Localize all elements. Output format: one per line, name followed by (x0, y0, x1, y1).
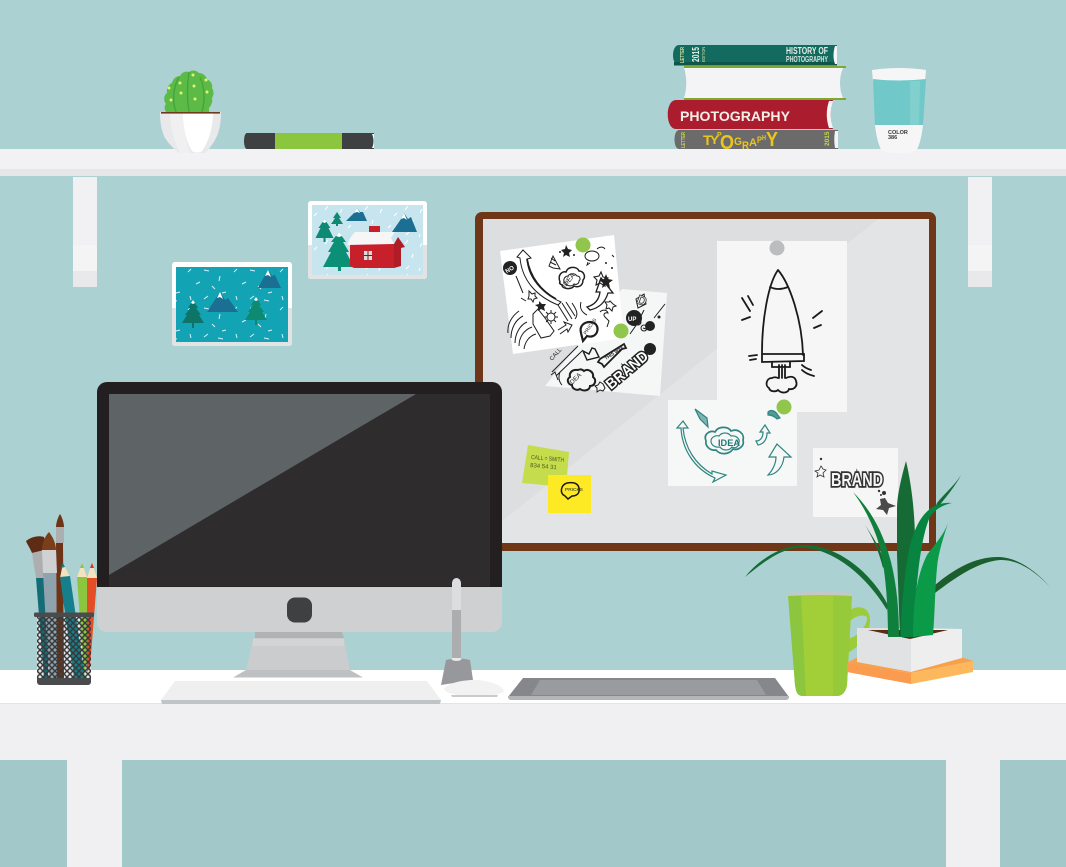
white pot (160, 112, 221, 153)
green pin (776, 400, 792, 414)
colour cup: COLOR (888, 130, 908, 136)
wall shelf (0, 149, 1066, 287)
note: doodles sheet back: CALL (549, 347, 564, 362)
desk top (0, 670, 1066, 703)
thin brush (56, 514, 64, 678)
power button (287, 598, 312, 622)
book: History of Photography: LETTER (680, 47, 686, 63)
shelf bracket left (73, 177, 97, 287)
shelf board (0, 149, 1066, 176)
note: brand sheet: BRAND (831, 470, 883, 490)
flat brush (42, 532, 57, 678)
note: doodles sheet back: D (635, 292, 649, 309)
book: Typography: R (742, 140, 749, 152)
book: History of Photography: PHOTOGRAPHY (786, 55, 828, 64)
book: Typography (674, 129, 838, 154)
book: Typography: Y (766, 129, 779, 151)
book: white pages (684, 66, 846, 100)
cup interior (37, 617, 91, 679)
monitor stand (233, 632, 363, 678)
sticky note: yellow: PRICKS (565, 487, 583, 493)
potted plant (745, 461, 1050, 684)
book: Typography: LETTER (681, 132, 687, 148)
book: Typography: T (703, 132, 712, 148)
thin back leaf (933, 475, 961, 513)
floor band (0, 760, 1066, 867)
teal pencil (60, 563, 85, 678)
sticky note: green: CALL = SMITH (531, 455, 564, 464)
front right leaf (913, 523, 948, 637)
centre leaf (897, 461, 915, 637)
book: Photography (668, 100, 833, 129)
postcard: red house (308, 201, 427, 279)
green pencil (77, 563, 87, 676)
left leaf (853, 492, 899, 637)
book: Typography: P (757, 135, 762, 145)
mug handle (846, 607, 870, 654)
screen (109, 394, 490, 586)
red pencil (87, 563, 97, 672)
book: Typography: P (717, 132, 722, 139)
keyboard (161, 681, 441, 704)
note: doodles sheet back: THIS WAY (604, 345, 624, 361)
cactus in white pot (160, 70, 221, 153)
colour cup: 386 (888, 135, 897, 141)
book: Typography: 2015 (824, 131, 831, 146)
note: rocket sheet (717, 241, 847, 412)
leaves (745, 461, 1050, 637)
note: doodles sheet front (500, 235, 624, 354)
note: doodles sheet front: PRICKS (583, 317, 599, 336)
book: History of Photography: HISTORY OF (786, 46, 828, 57)
shelf bracket right (968, 177, 992, 287)
mouse (444, 680, 504, 697)
book: History of Photography: EDITION (701, 47, 706, 62)
mountains (207, 270, 281, 312)
pin board (475, 212, 936, 551)
desktop computer (97, 382, 502, 678)
monitor bezel (97, 382, 502, 587)
pen and brush holder (26, 514, 97, 685)
stack of books (668, 45, 846, 154)
book: Typography: O (720, 132, 734, 154)
square pot (857, 628, 962, 672)
pine trees (316, 212, 354, 271)
green pin (614, 324, 628, 338)
note: doodles sheet back (545, 289, 667, 396)
note: idea sheet: IDEA (718, 438, 740, 448)
pine trees (182, 297, 267, 328)
sticky note: yellow (548, 475, 591, 513)
green pin (576, 238, 590, 252)
rocket sketch (742, 270, 822, 393)
postcard: teal landscape (172, 262, 292, 346)
note: brand sheet (813, 448, 898, 517)
note: doodles sheet back: UP (628, 317, 636, 323)
grey pin (770, 240, 784, 256)
back left leaf (865, 525, 885, 568)
book: History of Photography (673, 45, 837, 66)
stylus in stand (441, 578, 473, 685)
cactus (164, 70, 214, 113)
note: doodles sheet back: IDEA (567, 371, 584, 387)
book: Typography: A (749, 137, 757, 149)
note: doodles sheet back: BRAND (603, 348, 652, 393)
book: Typography: G (734, 136, 742, 148)
sticky note: green: 834 54 31 (530, 463, 558, 471)
book: Typography: H (762, 135, 766, 142)
book: Photography: PHOTOGRAPHY (680, 108, 791, 124)
arching leaf right (935, 557, 1050, 593)
big brush (26, 536, 48, 678)
large right leaf (901, 503, 952, 637)
note: idea sheet (668, 400, 797, 486)
book: Typography: Y (710, 133, 719, 147)
book: History of Photography: 2015 (691, 47, 702, 62)
screen reflection (109, 394, 416, 575)
desk front (0, 704, 1066, 760)
sticky note: green (522, 445, 569, 487)
wire mesh cup (34, 612, 94, 685)
desk leg right (946, 760, 1000, 867)
mountains (346, 208, 417, 232)
marker (244, 133, 374, 149)
green mug (788, 592, 870, 696)
colour cup (872, 68, 926, 153)
orange saucer (847, 657, 973, 684)
desk (0, 670, 1066, 867)
graphics tablet (508, 678, 789, 700)
note: doodles sheet front: IDEA (561, 272, 577, 289)
note: doodles sheet front: NO (505, 265, 516, 275)
desk leg left (67, 760, 122, 867)
red house (347, 226, 405, 268)
monitor chin (97, 587, 502, 632)
wall background (0, 0, 1066, 670)
arching leaf left (745, 545, 888, 610)
